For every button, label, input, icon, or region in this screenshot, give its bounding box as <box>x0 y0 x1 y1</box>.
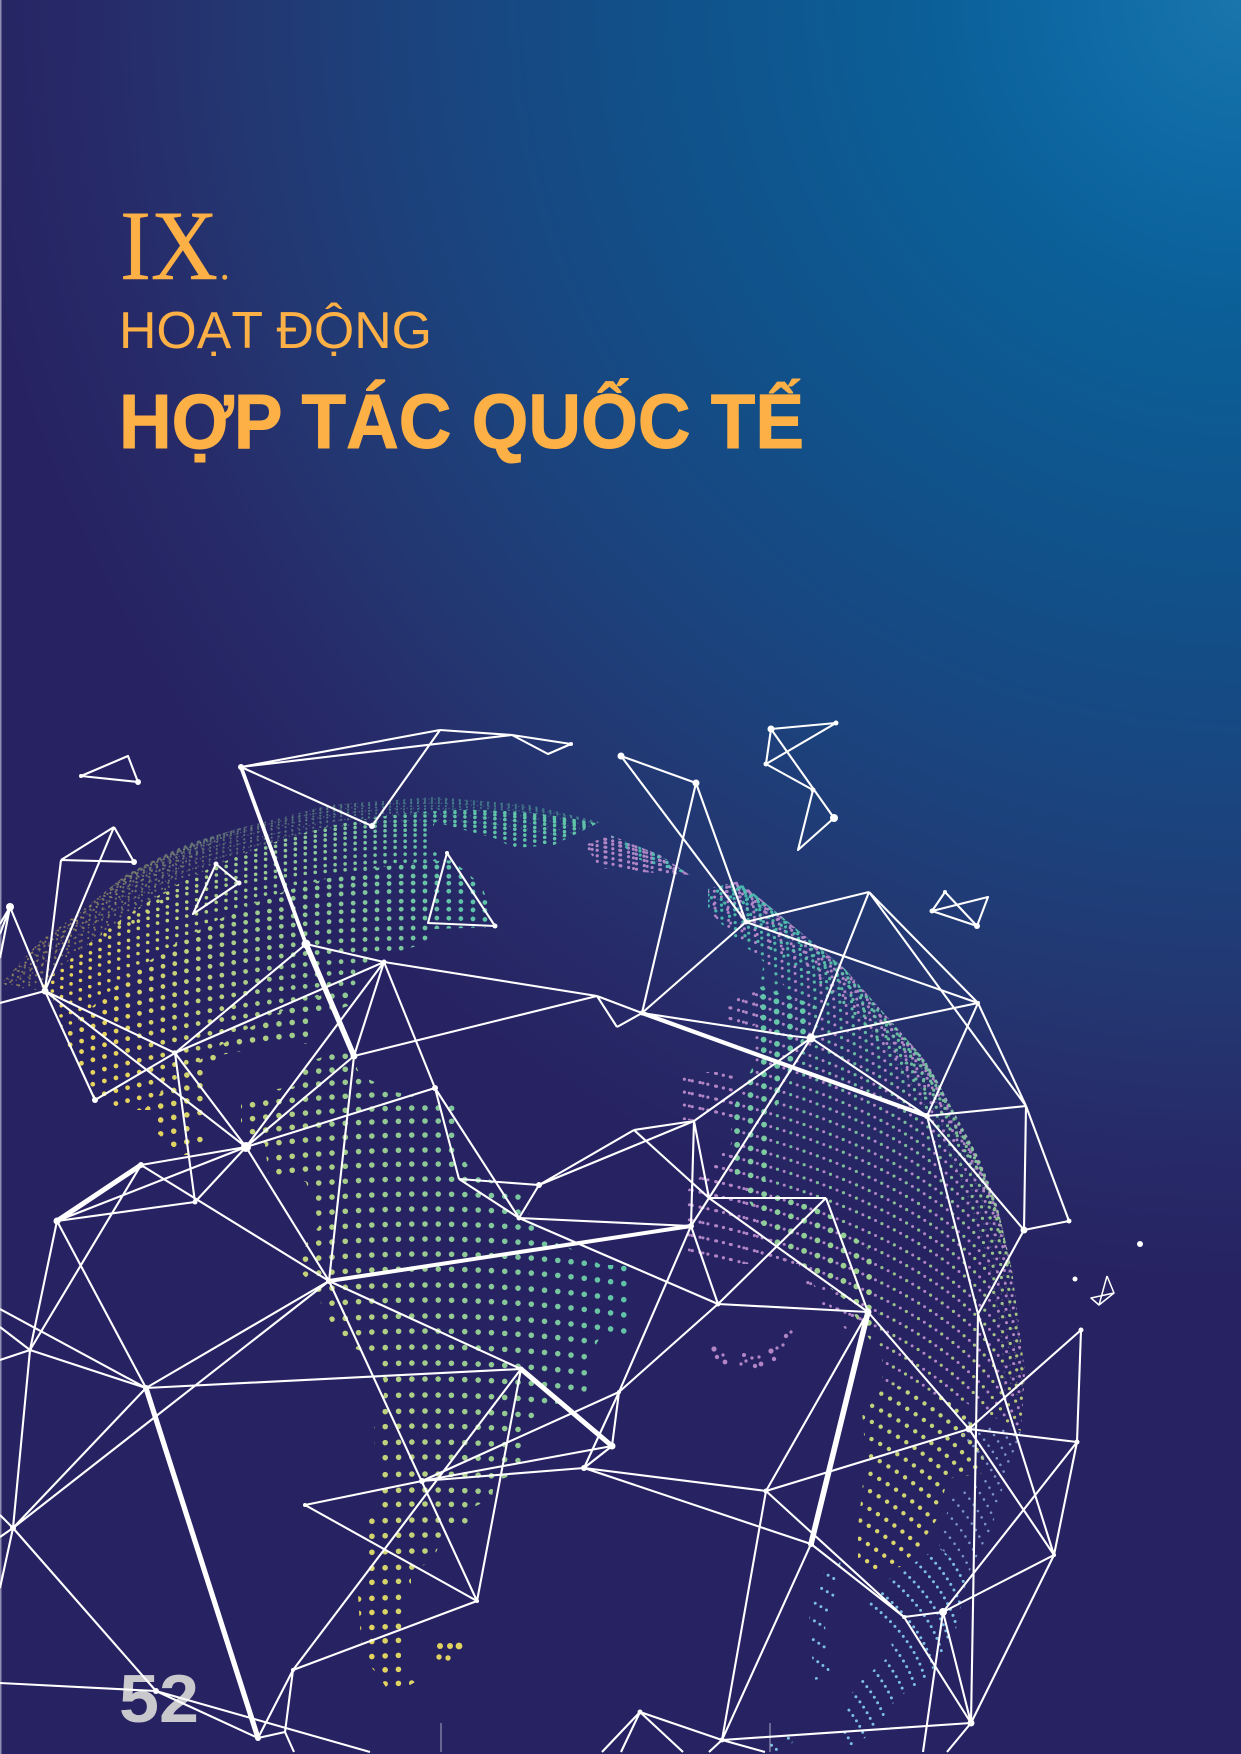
roman numeral: IX <box>120 190 218 301</box>
lower left mesh <box>0 1281 619 1752</box>
extra purple dots on inner coast <box>588 836 862 1329</box>
top right small cluster <box>766 723 836 850</box>
eastern limb fine dots <box>614 838 1025 1398</box>
yellow peninsula dots <box>858 1384 986 1570</box>
top left mesh <box>241 730 571 826</box>
dotted globe map <box>0 797 1028 1750</box>
chapter title <box>119 190 804 465</box>
eastern continent green dots <box>611 836 1024 1431</box>
thick accent links <box>57 767 927 1738</box>
left kite mesh <box>0 827 134 1003</box>
upper right mesh <box>621 756 1069 1314</box>
purple dotted arc <box>711 1330 793 1368</box>
lavender limb dots <box>939 1422 1021 1571</box>
network nodes <box>6 720 1143 1742</box>
heading line one: HOẠT ĐỘNG <box>119 302 432 360</box>
eastern continent purple dots <box>590 836 1025 1426</box>
network of white lines <box>0 723 1114 1752</box>
roman numeral: . <box>220 246 230 288</box>
tiny right glyph <box>1091 1276 1114 1305</box>
faint vertical ticks <box>441 1723 770 1752</box>
right small cluster <box>932 892 988 926</box>
eastern coast large teal dots <box>734 986 880 1340</box>
page number: 52 <box>119 1661 199 1737</box>
western continents dots <box>2 797 627 1687</box>
yellow island dots <box>436 1643 462 1661</box>
lower right mesh <box>584 1226 1081 1752</box>
small floating triangles <box>81 756 495 926</box>
heading line two: HỢP TÁC QUỐC TẾ <box>119 378 804 465</box>
central mesh <box>30 944 718 1388</box>
blue island dots <box>770 1548 966 1751</box>
